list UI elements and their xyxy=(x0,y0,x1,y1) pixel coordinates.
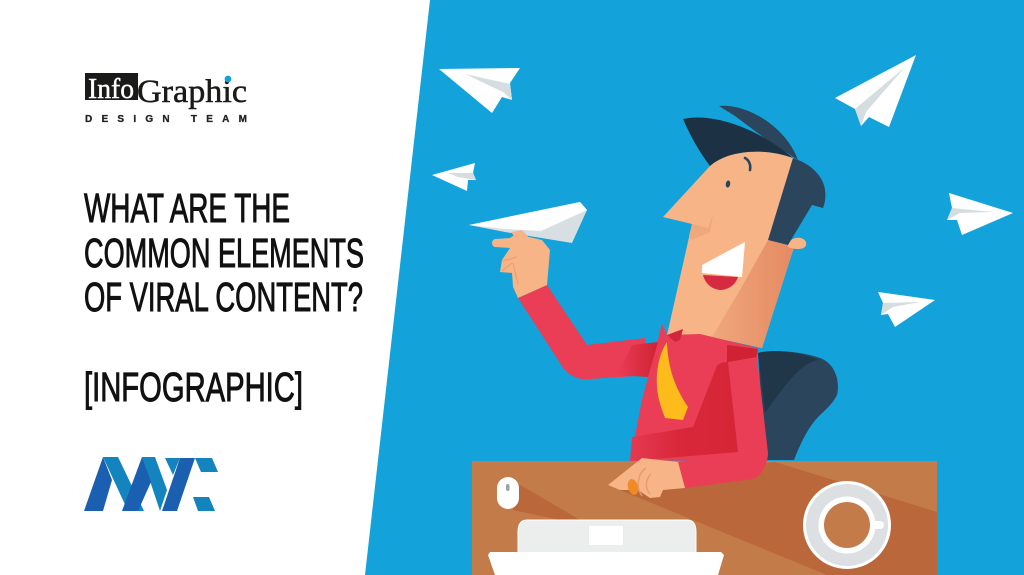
mouse xyxy=(497,477,519,509)
laptop xyxy=(488,520,724,575)
arm raised xyxy=(518,285,651,379)
nose shade xyxy=(689,214,713,240)
desk hand xyxy=(608,458,685,498)
blue background panel xyxy=(365,0,1024,575)
title: WHAT ARE THE xyxy=(84,185,290,231)
title: OF VIRAL CONTENT? xyxy=(84,274,363,320)
eye xyxy=(725,180,731,188)
title: [INFOGRAPHIC] xyxy=(84,364,303,410)
shirt shadow xyxy=(630,362,738,461)
ear xyxy=(788,238,806,249)
mouth tongue xyxy=(703,275,738,290)
paper plane: right xyxy=(947,193,1013,235)
chair xyxy=(758,351,838,460)
title xyxy=(84,185,364,410)
paper plane: lower right xyxy=(878,292,935,327)
title: COMMON ELEMENTS xyxy=(84,230,364,276)
torso xyxy=(630,323,765,461)
logo: InfoGraphic Design Team: DESIGN TEAM xyxy=(85,114,247,125)
logo: InfoGraphic Design Team: Graphic xyxy=(137,74,247,110)
paper plane: top right xyxy=(835,55,916,127)
neck and face xyxy=(663,152,794,348)
hair top back xyxy=(719,106,798,160)
raised hand xyxy=(492,234,550,298)
finger lines xyxy=(638,468,651,496)
collar shadow sleeve xyxy=(617,342,658,377)
logo: InfoGraphic Design Team xyxy=(85,73,247,125)
logo: InfoGraphic Design Team: Info xyxy=(88,74,134,105)
lower arm xyxy=(678,357,768,488)
paper plane: top left xyxy=(439,68,520,113)
character xyxy=(492,106,825,498)
desk xyxy=(472,461,937,575)
hair back xyxy=(768,158,825,245)
paper plane: small left xyxy=(432,163,476,191)
collar xyxy=(660,334,758,365)
thumb xyxy=(511,230,539,257)
neck shade xyxy=(712,240,794,348)
coffee cup and saucer xyxy=(803,481,891,569)
eyebrow xyxy=(745,158,750,170)
held paper plane xyxy=(469,202,587,257)
logo: MVC blue monogram xyxy=(84,457,218,511)
mouth teeth xyxy=(702,242,745,277)
tie xyxy=(657,342,688,420)
hair front xyxy=(683,117,793,166)
pencil xyxy=(626,478,640,496)
